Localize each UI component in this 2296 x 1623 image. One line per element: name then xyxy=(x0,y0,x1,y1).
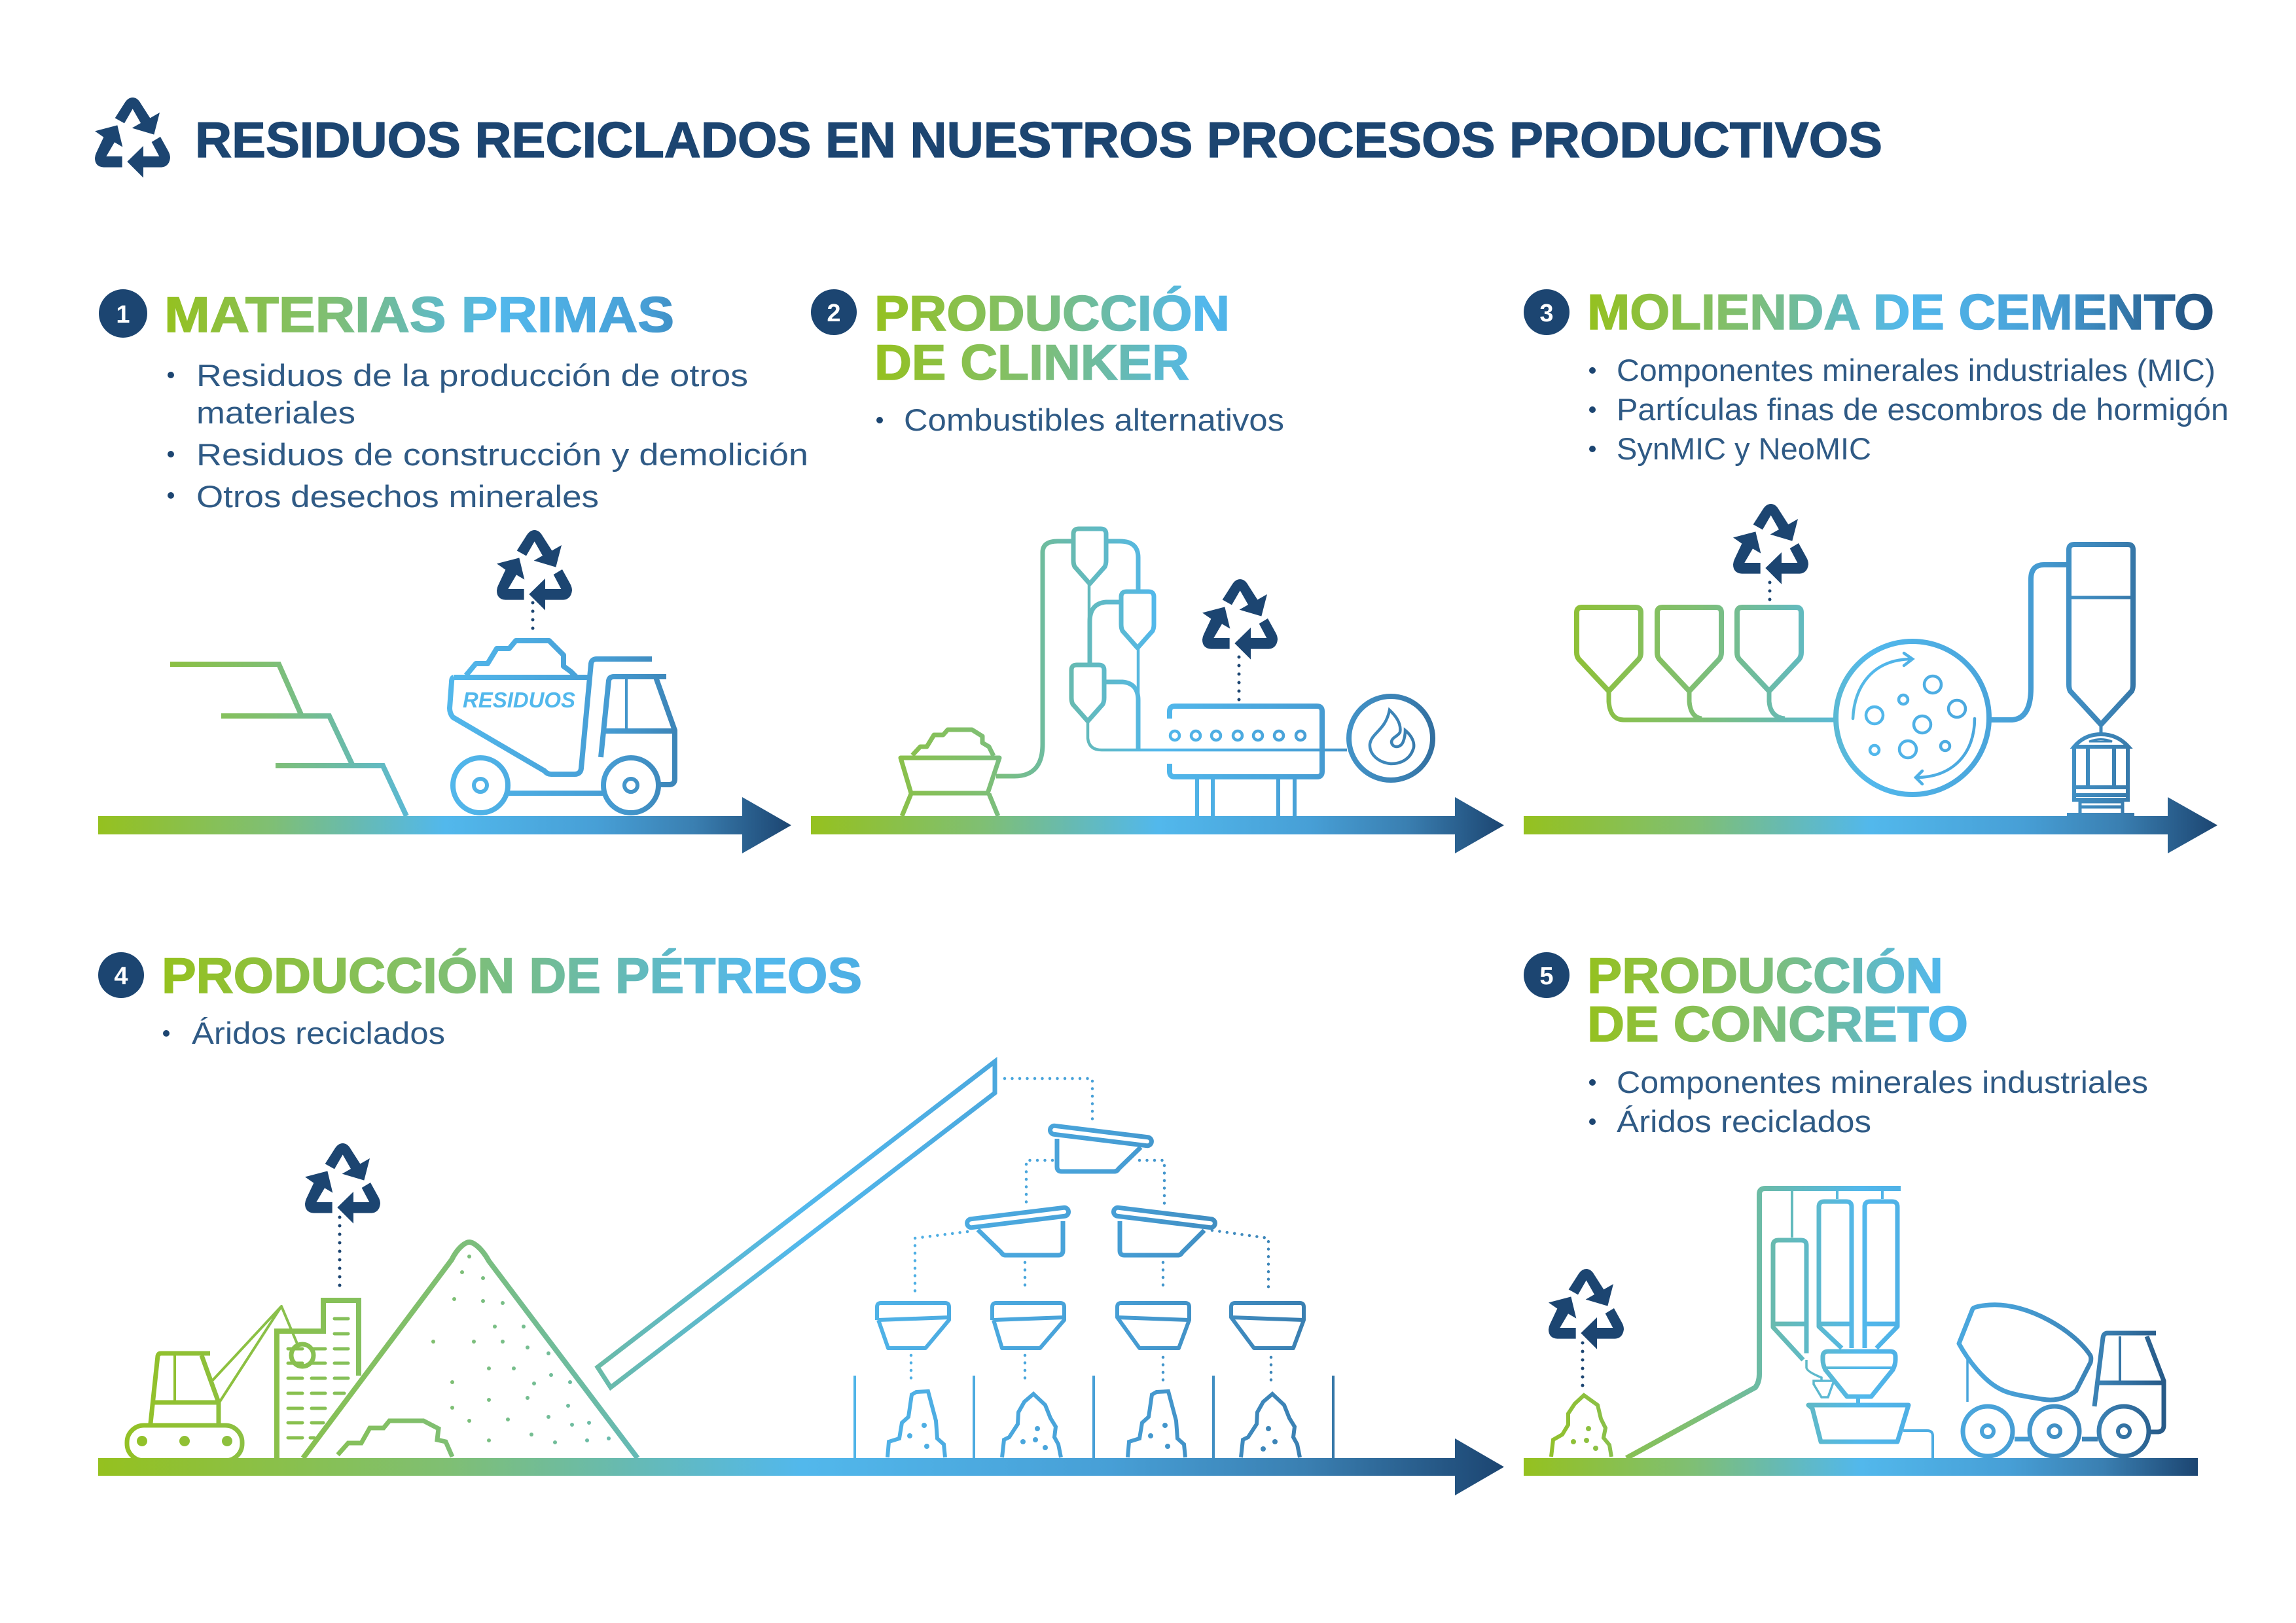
number badge 4: 4 xyxy=(114,963,128,990)
icon: recycle above building xyxy=(305,1143,380,1224)
dotted connector xyxy=(1768,582,1771,605)
dotted connector xyxy=(338,1217,342,1294)
bullet list: concreto: Componentes minerales industriales xyxy=(1617,1065,2148,1099)
bullet list: cemento xyxy=(1589,353,2229,466)
heading: materias primas: MATERIAS PRIMAS xyxy=(164,287,674,343)
bullet list: concreto: Áridos reciclados xyxy=(1617,1104,1871,1139)
demolition crane xyxy=(127,1306,297,1461)
bullet list: cemento: SynMIC y NeoMIC xyxy=(1617,431,1871,466)
number badge 3: 3 xyxy=(1539,300,1554,327)
title: RESIDUOS RECICLADOS EN NUESTROS PROCESOS PRODUCTIVOS xyxy=(195,113,1882,168)
panel: 1 materias primas xyxy=(98,287,808,853)
aggregate dots xyxy=(431,1255,611,1444)
icon: recycle above rock pile xyxy=(1549,1269,1624,1349)
feed conveyor pipe xyxy=(1626,1188,1901,1458)
small additive hopper xyxy=(1806,1360,1834,1397)
heading: produccion de concreto: DE CONCRETO xyxy=(1587,997,1968,1052)
panel: 3 molienda de cemento xyxy=(1524,285,2229,853)
bullet list: petreos: Áridos reciclados xyxy=(192,1016,445,1050)
dotted connector xyxy=(1237,657,1241,700)
conveyor belt xyxy=(598,1061,995,1387)
dump truck with waste load xyxy=(450,641,675,813)
dotted connector xyxy=(1581,1343,1584,1390)
panel: 4 produccion de petreos xyxy=(98,948,1504,1495)
icon: recycle above hoppers xyxy=(1733,504,1808,584)
batching silos xyxy=(1773,1190,1897,1360)
bullet list: concreto xyxy=(1589,1065,2148,1139)
number badge 2 xyxy=(811,289,857,335)
number badge 5: 5 xyxy=(1539,963,1554,990)
icon: recycle above truck xyxy=(497,530,572,611)
kiln xyxy=(1170,706,1322,816)
number badge 4 xyxy=(98,952,144,998)
pipe to silo xyxy=(1991,565,2067,720)
cement silo xyxy=(2069,544,2133,734)
preheater cyclones xyxy=(1071,529,1154,721)
panel: 5 produccion de concreto xyxy=(1524,948,2198,1476)
number badge 5 xyxy=(1524,952,1570,998)
icon: recycle xyxy=(95,98,170,178)
number badge 3 xyxy=(1524,289,1570,335)
number badge 2: 2 xyxy=(827,300,841,327)
packaging machine xyxy=(2067,734,2134,815)
heading: produccion de concreto: PRODUCCIÓN xyxy=(1587,948,1943,1004)
bullet list: materias primas: Residuos de la producción de otros xyxy=(196,358,748,393)
small rock pile xyxy=(338,1421,452,1457)
ore cart xyxy=(901,730,999,816)
process bar xyxy=(1524,1458,2198,1476)
aggregate stockpile xyxy=(303,1242,637,1458)
process arrow xyxy=(98,1438,1504,1495)
ball mill xyxy=(1836,641,1989,794)
panel: 2 produccion de clinker xyxy=(811,286,1504,853)
bullet list: clinker: Combustibles alternativos xyxy=(904,402,1284,437)
heading: produccion de clinker: PRODUCCIÓN xyxy=(874,286,1230,342)
dotted material flow lines xyxy=(911,1079,1271,1385)
three feed hoppers xyxy=(1577,607,1835,720)
flame burner xyxy=(1349,696,1433,780)
heading: molienda de cemento: MOLIENDA DE CEMENTO xyxy=(1587,285,2214,340)
heading: produccion de clinker: DE CLINKER xyxy=(874,335,1189,391)
bullet list: materias primas: materiales xyxy=(196,395,355,430)
recycled aggregate pile xyxy=(1551,1395,1611,1457)
bullet list: materias primas: Residuos de construcción y demolición xyxy=(196,437,808,472)
heading: produccion de concreto xyxy=(1587,948,1968,1052)
number badge 1: 1 xyxy=(116,301,130,329)
mixer xyxy=(1808,1405,1933,1458)
process arrow xyxy=(1524,797,2217,853)
aggregate piles by size xyxy=(888,1391,1300,1457)
truck label: RESIDUOS xyxy=(463,688,575,712)
icon: recycle above kiln xyxy=(1202,579,1278,660)
process arrow xyxy=(811,797,1504,853)
heading: produccion de clinker xyxy=(874,286,1230,391)
concrete mixer truck xyxy=(1959,1305,2164,1456)
vibrating screen hoppers xyxy=(967,1126,1215,1255)
stepped quarry terraces xyxy=(170,664,406,816)
building under demolition xyxy=(277,1300,359,1458)
bullet list: cemento: Partículas finas de escombros de hormigón xyxy=(1617,392,2229,427)
bay dividers xyxy=(855,1376,1333,1458)
pipes between cyclones xyxy=(996,541,1347,776)
bullet list: materias primas xyxy=(168,358,808,514)
header: recycle icon and main title xyxy=(95,98,1882,178)
heading: produccion de petreos: PRODUCCIÓN DE PÉTREOS xyxy=(162,948,862,1004)
dotted connector xyxy=(531,603,534,635)
weigh hopper xyxy=(1823,1351,1895,1405)
process arrow xyxy=(98,797,791,853)
bullet list: materias primas: Otros desechos minerales xyxy=(196,479,599,514)
number badge 1 xyxy=(99,289,147,338)
bullet list: cemento: Componentes minerales industriales (MIC) xyxy=(1617,353,2215,387)
four classifier hoppers xyxy=(877,1303,1304,1348)
